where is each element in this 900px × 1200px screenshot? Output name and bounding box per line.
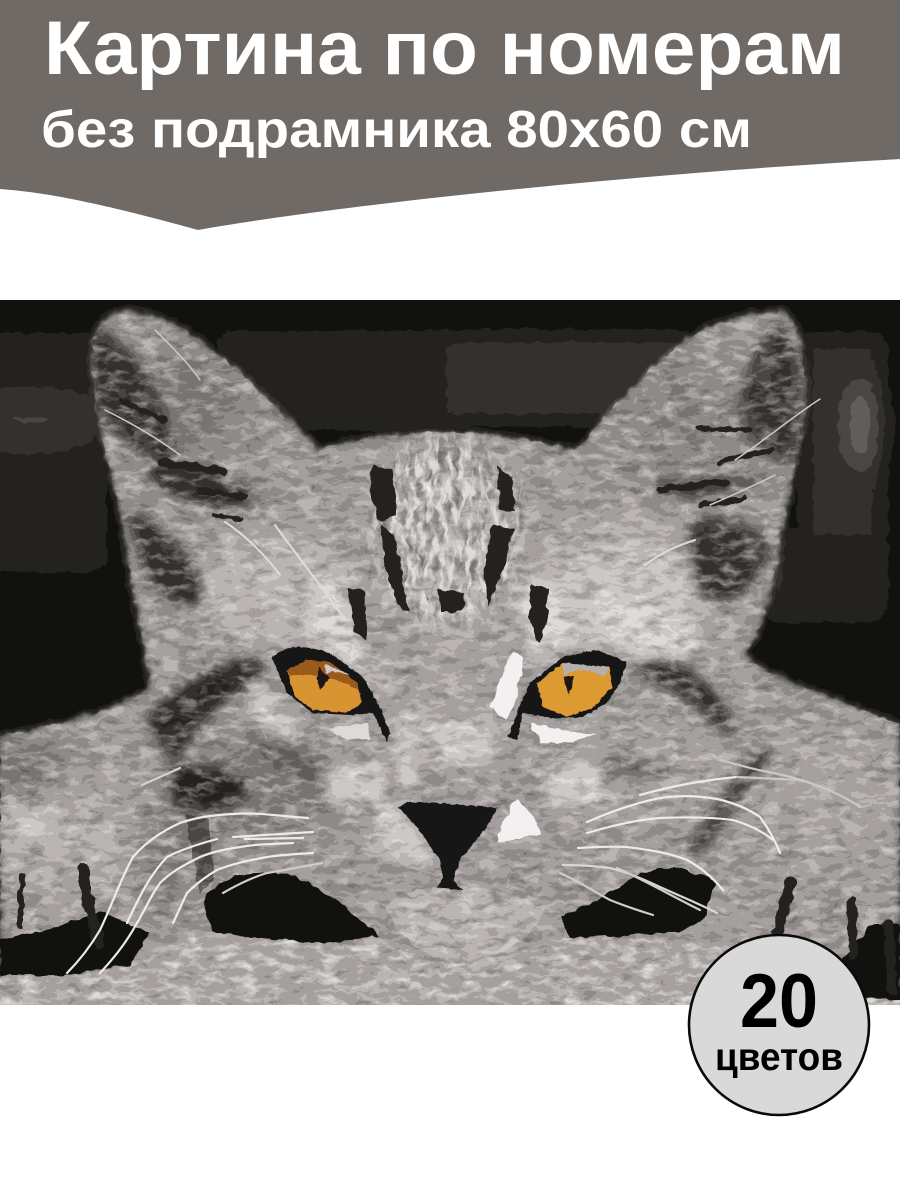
tonal zones of face, ears and paws — [0, 300, 900, 1005]
bright fur patches — [305, 570, 390, 690]
nose — [398, 802, 497, 890]
paw toes — [20, 868, 892, 990]
bright paint patches — [330, 652, 595, 842]
subtitle: без подрамника 80x60 см — [41, 101, 752, 159]
forehead streaks — [344, 431, 548, 652]
title: Картина по номерам — [44, 6, 845, 91]
left eye — [272, 647, 390, 742]
header banner — [0, 0, 900, 230]
muzzle and chin — [385, 887, 545, 960]
left ear dark zones — [88, 330, 178, 465]
ear fur streaks — [120, 400, 770, 520]
whisker-pad dark zones — [170, 767, 250, 810]
right paw shadow — [843, 925, 900, 1000]
number: 20 — [740, 959, 818, 1044]
badge: 20 colours — [689, 935, 869, 1115]
dark under chin — [0, 815, 900, 1000]
right eye — [508, 650, 627, 740]
ground — [0, 933, 900, 1005]
fur grain — [0, 300, 900, 1005]
dark background — [0, 300, 900, 988]
ground mottling — [0, 934, 900, 1005]
cat painting — [0, 270, 900, 1035]
left paw shadow — [0, 912, 150, 975]
right ear dark zones — [740, 320, 803, 465]
badge label: цветов — [715, 1036, 843, 1079]
whiskers — [67, 330, 860, 973]
forehead stripes — [348, 465, 549, 642]
fur base — [0, 311, 900, 1005]
painted tones — [0, 270, 900, 1035]
